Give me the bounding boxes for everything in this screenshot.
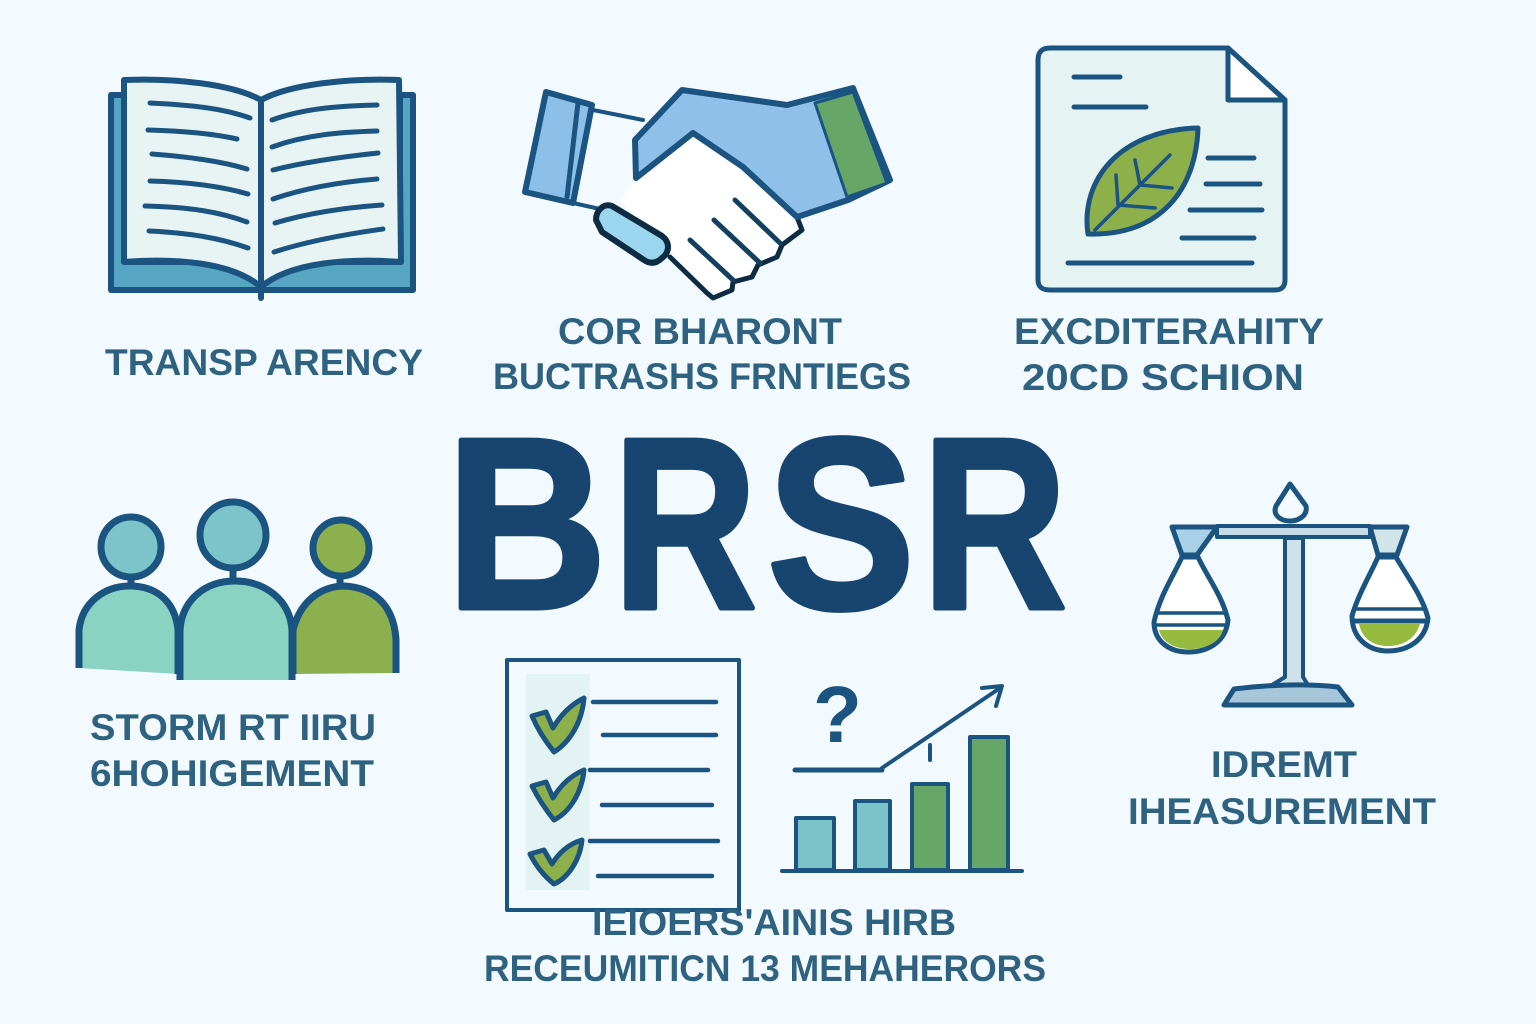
icon: checklist (507, 660, 739, 910)
title: B (446, 387, 607, 660)
label: corporate business frontiers (493, 311, 911, 397)
icon: handshake (525, 88, 890, 298)
label: impact measurement: IDREMT (1211, 744, 1357, 785)
icon: open book (111, 80, 413, 298)
title (446, 387, 1067, 660)
label: exceptionality: 20CD SCHION (1022, 357, 1304, 398)
question mark: ? (813, 670, 862, 759)
label: stakeholder engagement: STORM RT IIRU (90, 707, 376, 748)
title: S (767, 387, 915, 660)
label: impact measurement (1128, 744, 1436, 832)
label: corporate business frontiers: BUCTRASHS FRNTIEGS (493, 356, 911, 397)
label: recognition members: RECEUMITICN 13 MEHAHERORS (484, 948, 1046, 989)
label: exceptionality (1014, 311, 1324, 398)
title: R (922, 387, 1067, 660)
icon: bar chart with arrow and question mark (782, 670, 1022, 871)
label: impact measurement: IHEASUREMENT (1128, 791, 1436, 832)
icon: group of people (79, 502, 396, 680)
title: R (613, 387, 757, 660)
label: corporate business frontiers: COR BHARONT (558, 311, 842, 352)
label: stakeholder engagement: 6HOHIGEMENT (90, 753, 374, 794)
label: exceptionality: EXCDITERAHITY (1014, 311, 1324, 352)
icon: document with leaf (1038, 48, 1285, 290)
label: transparency: TRANSP ARENCY (105, 342, 423, 383)
icon: balance scale (1154, 484, 1428, 705)
label: recognition members: IEIOERS'AINIS HIRB (592, 902, 956, 943)
label: stakeholder engagement (90, 707, 376, 794)
label: recognition members (484, 902, 1046, 989)
